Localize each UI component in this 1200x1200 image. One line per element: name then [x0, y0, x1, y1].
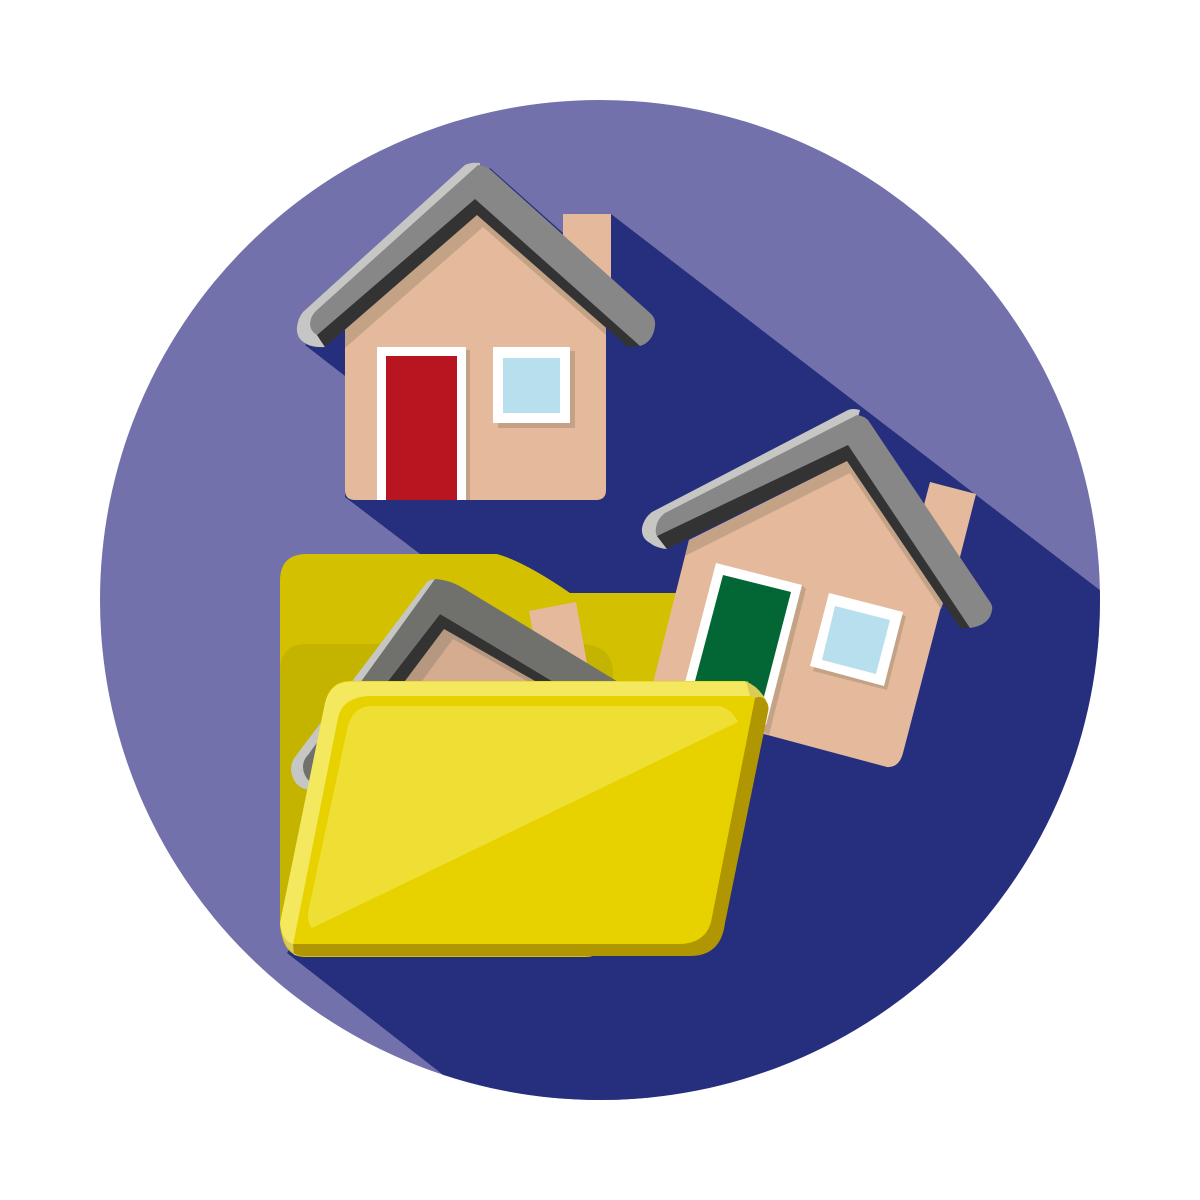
door — [377, 347, 470, 500]
folder front — [280, 681, 768, 956]
roof underside shadow — [405, 629, 535, 681]
folder corner highlight top right — [746, 682, 766, 700]
illustration: houses in a folder — [100, 100, 1100, 1100]
window — [810, 593, 906, 690]
folder front panel — [281, 681, 755, 944]
long shadow — [287, 168, 1110, 1110]
door — [680, 563, 806, 735]
roof underside shadow — [345, 214, 606, 348]
chimney — [563, 214, 611, 290]
folder rim highlight — [280, 682, 751, 945]
roof underside shadow — [685, 461, 943, 609]
folder corner highlight bottom left — [281, 930, 305, 956]
folder glare — [308, 706, 738, 928]
chimney — [529, 602, 590, 680]
folder edge shadow — [281, 681, 768, 956]
house body — [648, 461, 942, 767]
folder back — [280, 554, 680, 957]
house: top — [297, 163, 655, 500]
house: right — [642, 409, 992, 767]
window — [493, 347, 575, 428]
roof — [297, 163, 655, 347]
house body — [345, 215, 606, 500]
chimney — [920, 482, 976, 565]
roof — [642, 409, 992, 628]
house body — [340, 629, 535, 760]
background circle — [100, 100, 1100, 1100]
roof — [291, 579, 620, 790]
house: in folder — [291, 579, 620, 790]
